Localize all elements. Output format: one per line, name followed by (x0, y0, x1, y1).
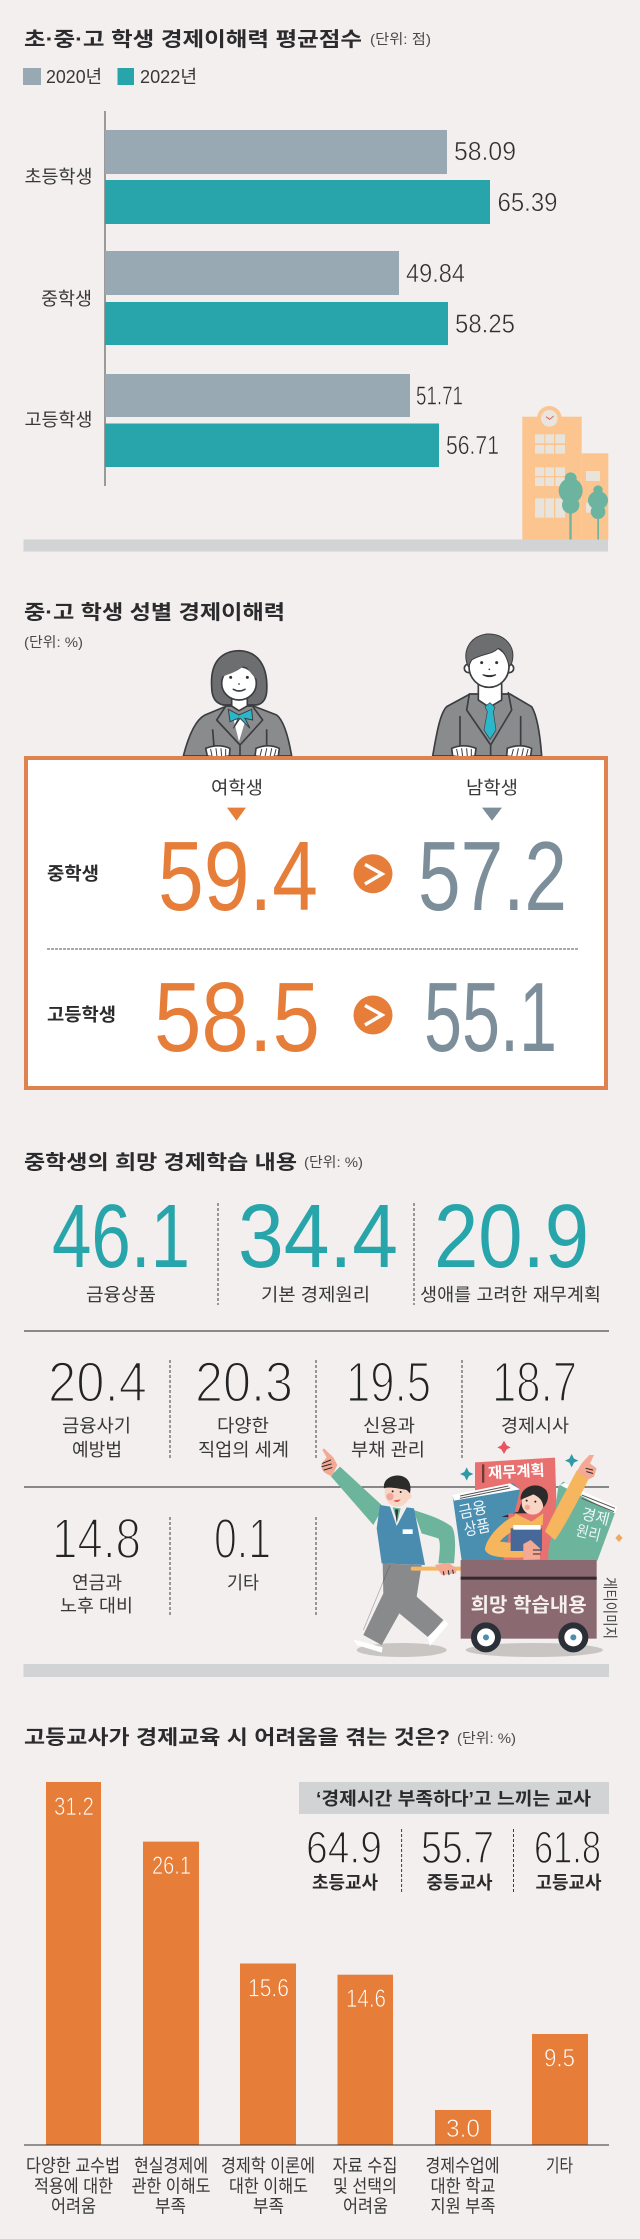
stat 18.7: 18.7 (492, 1351, 577, 1415)
stat 0.1: 기타 (227, 1573, 259, 1593)
ground band (24, 540, 608, 552)
books in cart: 상품 (462, 1516, 492, 1540)
stat 20.4: 20.4 (48, 1351, 147, 1415)
stat high teachers: 고등교사 (536, 1873, 602, 1893)
cart (461, 1560, 597, 1652)
bottom row stats (52, 1507, 316, 1616)
stat 20.3: 다양한 (217, 1416, 269, 1436)
row: high school: 55.1 (424, 962, 557, 1072)
bar 31.2: 적용에 대한 (34, 2176, 113, 2196)
boy pushing cart (321, 1448, 462, 1653)
middle school bars: 49.84 (406, 258, 465, 288)
high school bars: 고등학생 (24, 410, 92, 430)
stat 20.3: 20.3 (195, 1351, 293, 1415)
bar 15.6 (221, 1964, 315, 2216)
bar 15.6: 경제학 이론에 (221, 2156, 315, 2176)
stat 19.5 (346, 1351, 431, 1460)
stat 19.5: 부채 관리 (351, 1440, 425, 1460)
stat elementary teachers (306, 1822, 382, 1893)
stat 14.8: 노후 대비 (60, 1596, 133, 1616)
bar 14.6: 자료 수집 (332, 2156, 398, 2176)
unit note: (단위: 점) (370, 31, 431, 47)
middle school bars: 중학생 (41, 289, 92, 309)
stat 20.9: 20.9 (434, 1187, 589, 1287)
photo credit: 게티이미지 (601, 1577, 618, 1639)
books in cart: 경제 (580, 1506, 611, 1529)
legend: 2022년 (140, 67, 197, 87)
high school bars: 56.71 (446, 430, 499, 460)
bar 3.0: 경제수업에 (426, 2156, 500, 2176)
stat middle teachers: 중등교사 (426, 1873, 493, 1893)
stat high teachers: 61.8 (534, 1822, 601, 1873)
stat elementary teachers: 64.9 (306, 1822, 382, 1873)
stat 46.1 (52, 1187, 190, 1305)
bar chart: scores (24, 111, 558, 486)
unit note: (단위: %) (457, 1730, 516, 1746)
bar 26.1: 관한 이해도 (132, 2176, 210, 2196)
icon: female student (183, 651, 292, 757)
bar 9.5: 9.5 (544, 2044, 575, 2072)
stat 19.5: 19.5 (346, 1351, 431, 1415)
books in cart: 원리 (574, 1522, 602, 1545)
bar 26.1: 부족 (155, 2196, 186, 2216)
bar 15.6: 대한 이해도 (229, 2176, 308, 2196)
bar 15.6: 15.6 (248, 1974, 289, 2002)
stat 18.7: 경제시사 (501, 1416, 569, 1436)
middle row stats (48, 1351, 577, 1460)
stat 19.5: 신용과 (363, 1416, 415, 1436)
stat 20.3: 직업의 세계 (198, 1440, 289, 1460)
stat 14.8: 연금과 (72, 1573, 122, 1593)
illustration: students with cart of books (321, 1441, 623, 1657)
stat 14.8: 14.8 (52, 1507, 141, 1571)
row: middle school (47, 821, 567, 931)
column header: female (211, 778, 263, 821)
bar 9.5: 기타 (546, 2156, 573, 2176)
ground band (24, 1664, 609, 1677)
row: middle school: 59.4 (158, 821, 318, 931)
column header: male: 남학생 (466, 778, 518, 798)
bar 14.6 (332, 1975, 398, 2216)
bar 14.6: 및 선택의 (333, 2176, 397, 2196)
legend (23, 67, 197, 87)
stat 46.1: 금융상품 (86, 1285, 156, 1305)
bar 14.6: 어려움 (343, 2196, 388, 2216)
icon: male student (433, 634, 542, 757)
stat 0.1 (214, 1507, 271, 1593)
stat 34.4: 기본 경제원리 (261, 1285, 370, 1305)
row: high school (47, 962, 557, 1072)
unit note: (단위: %) (24, 634, 83, 650)
bar 31.2 (26, 1782, 120, 2216)
books in cart: 재무계획 (488, 1462, 545, 1482)
stat elementary teachers: 초등교사 (312, 1873, 378, 1893)
bar 3.0: 대한 학교 (430, 2176, 496, 2196)
bar 31.2: 31.2 (54, 1793, 94, 1821)
stat middle teachers (421, 1822, 494, 1893)
stat 20.4 (48, 1351, 147, 1460)
icon: school building (522, 406, 608, 540)
high school bars: 51.71 (416, 380, 463, 410)
books in cart (452, 1458, 617, 1563)
stat 20.9: 생애를 고려한 재무계획 (420, 1285, 601, 1305)
stat middle teachers: 55.7 (421, 1822, 494, 1873)
heading: teacher difficulties: 고등교사가 경제교육 시 어려움을 겪는 것은? (24, 1726, 450, 1749)
middle school bars (41, 251, 515, 345)
bar 26.1: 현실경제에 (134, 2156, 208, 2176)
stat 20.3 (195, 1351, 293, 1460)
top three stats (52, 1187, 601, 1305)
bar 3.0 (426, 2110, 500, 2216)
column header: female: 여학생 (211, 778, 263, 798)
sparkles (460, 1441, 623, 1542)
row: middle school: 중학생 (47, 864, 99, 884)
callout: teachers feeling lack of time: ‘경제시간 부족하다’고 느끼는 교사 (316, 1789, 591, 1809)
stat 20.4: 예방법 (72, 1440, 122, 1460)
panel: teacher difficulties (24, 1726, 609, 2216)
row: high school: 58.5 (154, 962, 320, 1072)
middle school bars: 58.25 (455, 308, 515, 338)
legend: 2020년 (46, 67, 102, 87)
row: high school: 고등학생 (47, 1005, 116, 1025)
stat 18.7 (492, 1351, 577, 1436)
girl in cart (485, 1455, 597, 1561)
elementary bars: 58.09 (454, 136, 516, 166)
unit note: (단위: %) (304, 1154, 363, 1170)
heading: desired topics: 중학생의 희망 경제학습 내용 (24, 1151, 297, 1174)
elementary bars: 65.39 (498, 187, 558, 217)
panel: desired learning topics (24, 1151, 623, 1677)
bar 14.6: 14.6 (346, 1985, 386, 2013)
bar 15.6: 부족 (253, 2196, 284, 2216)
elementary bars (24, 130, 558, 224)
heading: average score: 초·중·고 학생 경제이해력 평균점수 (24, 28, 362, 51)
bar 31.2: 어려움 (51, 2196, 96, 2216)
panel: average score by school level (23, 28, 608, 552)
stat 14.8 (52, 1507, 141, 1616)
column header: male (466, 778, 518, 821)
bar chart: difficulties (24, 1782, 609, 2216)
bar 9.5 (532, 2034, 588, 2176)
bar 26.1: 26.1 (152, 1852, 191, 1880)
callout: teachers feeling lack of time (299, 1782, 609, 1893)
bar 3.0: 3.0 (446, 2115, 480, 2143)
stat 20.4: 금융사기 (62, 1416, 131, 1436)
bar 3.0: 지원 부족 (430, 2196, 496, 2216)
comparison box (26, 758, 606, 1088)
elementary bars: 초등학생 (24, 167, 92, 187)
bar 31.2: 다양한 교수법 (26, 2156, 120, 2176)
bar 26.1 (132, 1842, 210, 2216)
cart: 희망 학습내용 (471, 1595, 587, 1617)
panel: literacy by gender (24, 601, 606, 1088)
heading: gender: 중·고 학생 성별 경제이해력 (24, 601, 285, 624)
books in cart: 금융 (457, 1498, 489, 1522)
stat high teachers (534, 1822, 602, 1893)
stat 46.1: 46.1 (52, 1187, 190, 1287)
stat 34.4: 34.4 (238, 1187, 398, 1287)
row: middle school: 57.2 (418, 821, 567, 931)
high school bars (24, 374, 499, 467)
stat 0.1: 0.1 (214, 1507, 271, 1571)
